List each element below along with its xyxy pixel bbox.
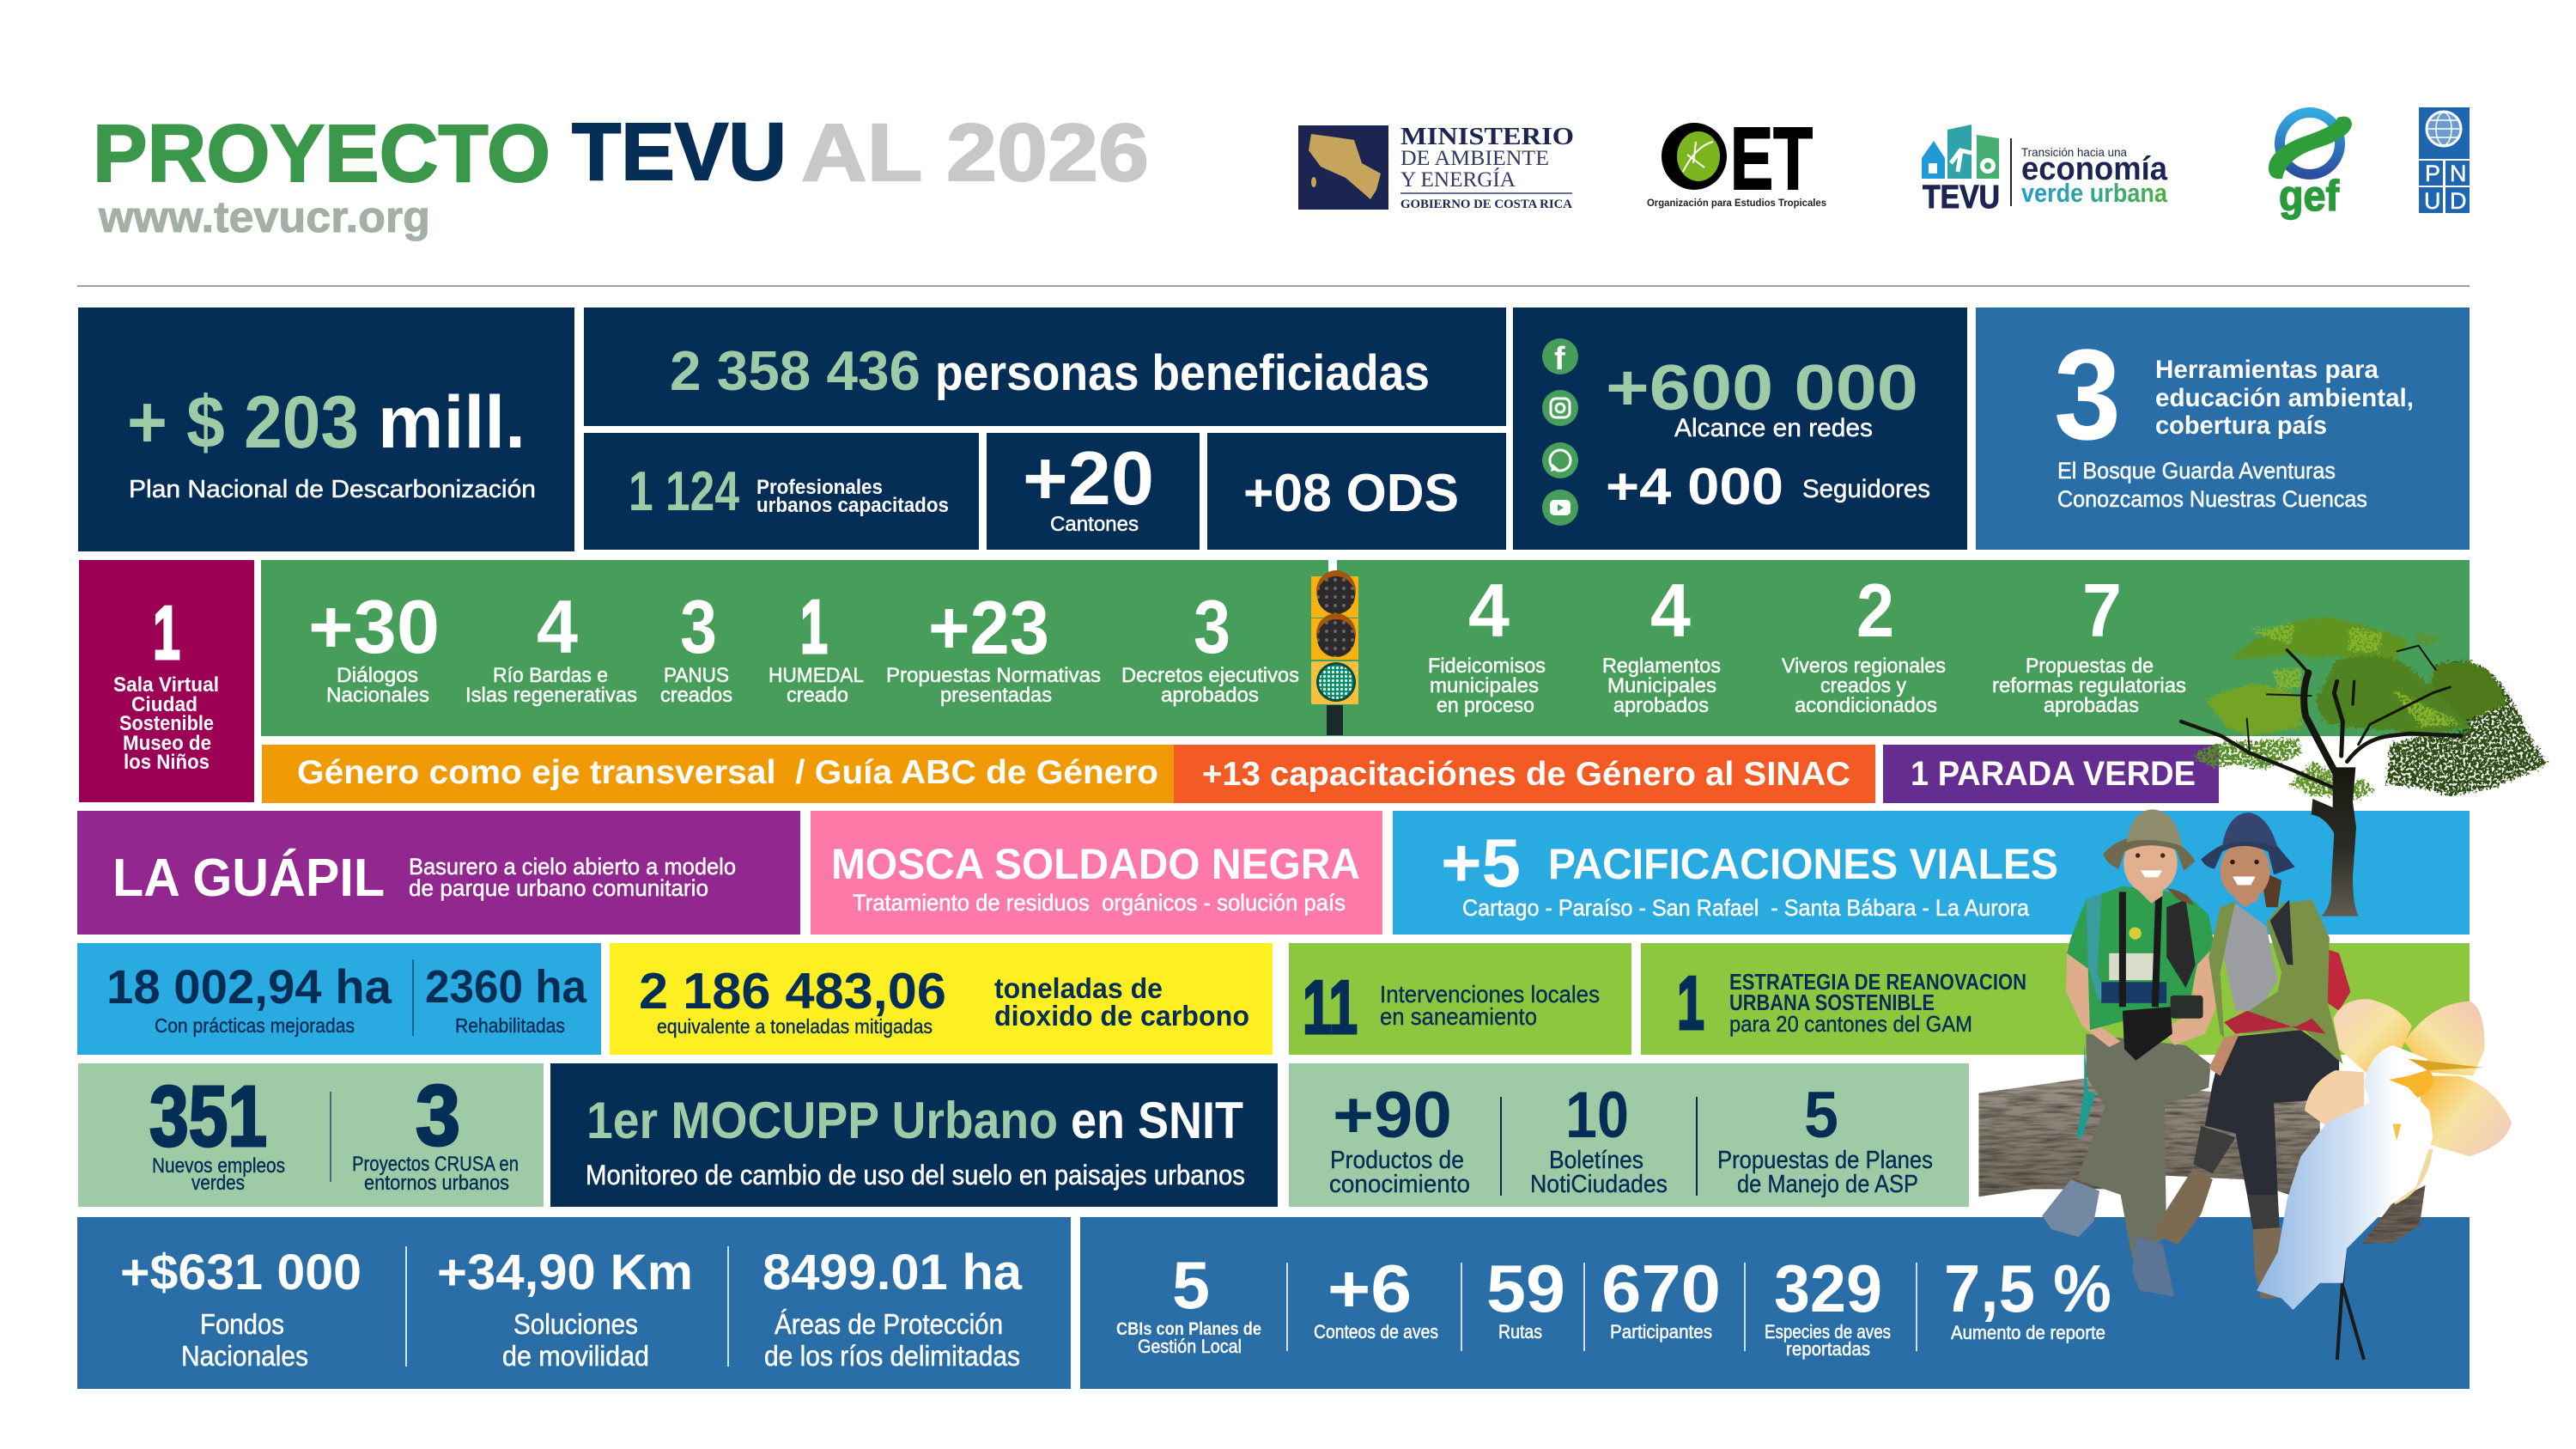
stat: areas de proteccion [762,1245,1023,1372]
panel: ODS [1207,433,1506,550]
icon: youtube [1542,490,1578,526]
stat: reglamentos: Reglamentos [1602,654,1721,678]
panel: cantones: +20 [1023,435,1154,521]
stat: rio bardas: Islas regenerativas [465,684,637,707]
label: Plan Nacional de Descarbonización [129,476,536,503]
logo: OET: Organización para Estudios Tropicales [1647,197,1826,209]
stat: empleos verdes: 351 [149,1068,267,1165]
panel: capacitaciones genero: +13 capacitaciónes de Género al SINAC [1202,756,1850,793]
stat: reglamentos: Municipales [1607,674,1716,697]
panel: cantones [987,433,1200,550]
panel: la guapil: Basurero a cielo abierto a modelo [409,854,736,880]
stat: empleos verdes: verdes [191,1172,245,1195]
panel: sala virtual: Sostenible [119,712,214,735]
panel: pacificaciones viales: +5 [1441,825,1521,901]
stat: propuestas normativas [886,585,1101,707]
stat: practicas mejoradas [106,959,392,1037]
stat: fondos nacionales [120,1245,361,1372]
stat: reformas: 7 [2082,568,2122,653]
stat: especies: 329 [1774,1251,1882,1326]
website url: www.tevucr.org [98,192,430,241]
stat: productos de conocimiento [1329,1079,1470,1198]
stat: dialogos: +30 [308,584,440,669]
stat: boletines: Boletínes [1549,1147,1643,1174]
logo: TEVU economia verde urbana: verde urbana [2021,178,2168,208]
panel: sala virtual: Ciudad [131,693,197,716]
stat: soluciones de movilidad [437,1245,693,1372]
stat: aumento de reporte: Aumento de reporte [1951,1322,2105,1343]
stat: areas de proteccion: de los ríos delimitadas [764,1340,1020,1372]
panel: la guapil [77,811,800,935]
title: AL 2026 [801,107,1149,198]
stat: humedal: creado [787,684,848,707]
stat: fideicomisos [1428,568,1546,717]
logo: Ministerio de Ambiente y Energia: Y ENERGÍA [1400,167,1516,192]
stat: reformas: Propuestas de [2026,654,2154,678]
panel: sala virtual: 1 [153,590,180,675]
panel: redes sociales [1513,307,1967,550]
panel: mocupp: en SNIT [1071,1092,1243,1149]
stat: proyectos crusa: entornos urbanos [364,1172,509,1195]
panel: herramientas [1976,307,2470,550]
stat: participantes: Participantes [1610,1321,1712,1342]
stat: propuestas normativas: +23 [928,585,1049,670]
stat: conteos [1314,1251,1438,1342]
panel: la guapil: de parque urbano comunitario [409,875,708,901]
panel: herramientas: Herramientas para [2155,356,2379,384]
logo: gef [2269,113,2352,220]
panel: mocupp: 1er MOCUPP Urbano [586,1092,1058,1149]
logo: Ministerio de Ambiente y Energia [1298,123,1574,211]
panel: personas beneficiadas: personas beneficiadas [935,345,1430,401]
stat: CBIs: CBIs con Planes de [1116,1319,1261,1339]
stat: planes de manejo [1717,1079,1933,1198]
logo: TEVU economia verde urbana: TEVU [1923,180,2000,216]
logo: TEVU economia verde urbana: Transición hacia una [2021,145,2127,159]
panel: empleos y proyectos [78,1063,544,1207]
stat: viveros: acondicionados [1795,694,1937,717]
stat: seguidores: +4 000 [1606,458,1783,515]
stat: decretos: aprobados [1161,684,1259,707]
stat: soluciones de movilidad: Soluciones [513,1308,638,1340]
stat: especies: reportadas [1786,1338,1870,1360]
icon: traffic light [1311,559,1358,735]
panel: profesionales capacitados [584,433,979,550]
panel: intervenciones locales: 11 [1303,965,1358,1050]
stat: rio bardas: 4 [537,584,578,669]
stat: rehabilitadas [425,961,587,1037]
stat: especies: Especies de aves [1765,1321,1891,1342]
panel: genero: Género como eje transversal / Guía ABC de Género [297,754,1158,791]
panel: toneladas de carbono: equivalente a toneladas mitigadas [657,1015,933,1038]
panel: estrategia de renovacion: para 20 cantones del GAM [1729,1011,1972,1037]
stat: areas de proteccion: 8499.01 ha [762,1245,1023,1300]
panel: descarbonizacion [78,307,574,551]
panel: toneladas de carbono: 2 186 483,06 [639,963,946,1020]
stat: reglamentos: aprobados [1613,694,1709,717]
stat: planes de manejo: de Manejo de ASP [1737,1171,1918,1198]
logo: PNUD: D [2450,188,2466,214]
title: PROYECTO [93,108,550,199]
logo: OET [1647,109,1826,209]
stat: rehabilitadas: Rehabilitadas [455,1014,565,1037]
stat: alcance en redes: Alcance en redes [1674,414,1873,442]
image: woman right [2151,813,2350,1299]
logo: TEVU economia verde urbana: economía [2021,151,2168,187]
logo: TEVU economia verde urbana [1922,125,2168,216]
stat: fideicomisos: 4 [1468,568,1510,653]
stat: conteos: Conteos de aves [1314,1321,1438,1342]
stat: alcance en redes [1606,351,1918,442]
stat: panus: creados [660,684,732,707]
logo: PNUD [2419,107,2470,214]
stat: fondos nacionales: Fondos [200,1308,284,1340]
image: log [1978,1079,2426,1244]
panel: mocupp [550,1063,1278,1207]
icon: whatsapp [1542,442,1578,478]
title [93,107,1149,199]
stat: dialogos [308,584,440,707]
stat: 203 millones: mill. [378,381,526,464]
stat: planes de manejo: 5 [1804,1079,1838,1152]
panel: productos [1289,1063,1969,1207]
stat: aumento de reporte: 7,5 % [1944,1251,2111,1326]
panel: herramientas: Conozcamos Nuestras Cuencas [2057,486,2367,512]
panel: pacificaciones viales: Cartago - Paraíso - San Rafael - Santa Bábara - La Aurora [1462,895,2030,921]
stat: dialogos: Diálogos [337,664,418,687]
logo: PNUD: P [2425,161,2440,186]
panel: toneladas de carbono [610,943,1273,1055]
stat: humedal: HUMEDAL [769,664,864,687]
stat: CBIs [1116,1247,1261,1357]
stat: proyectos crusa: 3 [416,1068,460,1164]
panel: herramientas: 3 [2054,322,2121,466]
stat: empleos verdes: Nuevos empleos [152,1154,285,1178]
stat: reformas: aprobadas [2044,694,2139,717]
stat: productos de conocimiento: +90 [1333,1079,1452,1152]
panel: estrategia de renovacion: URBANA SOSTENIBLE [1729,989,1935,1015]
title: TEVU [572,107,787,198]
panel: cantones: Cantones [1050,513,1139,536]
stat: boletines: NotiCiudades [1530,1171,1668,1198]
stat: reglamentos [1602,568,1721,717]
panel: conteos de aves [1080,1217,2470,1389]
panel: sala virtual: los Niños [124,751,210,774]
stat: decretos: 3 [1194,584,1230,669]
stat: reglamentos: 4 [1650,568,1691,653]
image: flower [2305,999,2512,1204]
icon: instagram [1542,390,1578,426]
image: tree [2181,618,2548,916]
stat: proyectos crusa: Proyectos CRUSA en [352,1153,519,1176]
stat: conteos: +6 [1327,1251,1412,1326]
stat: productos de conocimiento: conocimiento [1329,1171,1470,1198]
stat: viveros: creados y [1820,674,1906,697]
panel: sala virtual: Museo de [123,732,211,755]
panel: genero [262,745,1174,803]
panel: personas beneficiadas [584,307,1506,426]
stat: fondos nacionales: +$631 000 [120,1245,361,1300]
stat: practicas mejoradas: 18 002,94 ha [106,959,392,1014]
panel: profesionales capacitados: 1 124 [629,460,739,522]
panel: herramientas: El Bosque Guarda Aventuras [2057,458,2336,484]
stat: humedal [769,584,864,707]
panel: mosca soldado negra: MOSCA SOLDADO NEGRA [831,840,1360,888]
icon: facebook: f [1554,341,1565,377]
stat: dialogos: Nacionales [326,684,429,707]
stat: 203 millones [127,381,526,464]
stat: decretos [1121,584,1299,707]
image: women on log with flower and egret [1978,809,2512,1360]
stat: propuestas normativas: presentadas [940,684,1052,707]
stat: reformas [1992,568,2186,717]
logo: Ministerio de Ambiente y Energia: GOBIERNO DE COSTA RICA [1400,198,1572,211]
panel: toneladas de carbono: dioxido de carbono [994,1000,1249,1032]
panel: ODS: +08 ODS [1243,464,1459,523]
panel: profesionales capacitados: Profesionales [756,476,883,499]
stat: propuestas normativas: Propuestas Normativas [886,664,1101,687]
logo: Ministerio de Ambiente y Energia: MINISTERIO [1400,123,1574,150]
panel: sala virtual: Sala Virtual [113,673,219,697]
stat: soluciones de movilidad: +34,90 Km [437,1245,693,1300]
panel: parada verde [1883,745,2219,803]
stat: productos de conocimiento: Productos de [1330,1147,1464,1174]
panel: la guapil: LA GUÁPIL [112,849,385,908]
panel: pacificaciones viales: PACIFICACIONES VIALES [1548,840,2058,888]
stat: seguidores [1606,458,1930,515]
panel: hectareas [77,943,601,1055]
panel: toneladas de carbono: toneladas de [994,972,1163,1004]
panel: intervenciones locales [1289,943,1631,1055]
stat: rehabilitadas: 2360 ha [425,961,587,1013]
panel: estrategia de renovacion [1641,943,2470,1055]
stat: seguidores: Seguidores [1802,475,1930,503]
stat: panus: PANUS [664,664,729,687]
panel: herramientas: educación ambiental, [2155,384,2414,412]
panel: mosca soldado negra [811,811,1382,935]
stat: rio bardas [465,584,637,707]
stat: panus: 3 [680,584,717,669]
stat: fideicomisos: en proceso [1437,694,1534,717]
panel: personas beneficiadas: 2 358 436 [670,339,920,402]
panel: sala virtual [79,560,254,802]
panel: mocupp: Monitoreo de cambio de uso del suelo en paisajes urbanos [586,1160,1245,1190]
stat: fideicomisos: Fideicomisos [1428,654,1546,678]
panel: pacificaciones viales [1393,811,2470,935]
stat: viveros [1782,568,1946,717]
panel: estrategia de renovacion: ESTRATEGIA DE REANOVACION [1729,969,2026,995]
stat: humedal: 1 [800,584,828,669]
logo: Ministerio de Ambiente y Energia: DE AMBIENTE [1400,147,1549,170]
logo: OET: ET [1730,109,1813,208]
stat: CBIs: Gestión Local [1138,1336,1242,1357]
stat: fideicomisos: municipales [1430,674,1539,697]
image: woman left [2042,809,2216,1296]
panel: parada verde: 1 PARADA VERDE [1911,755,2196,793]
panel: estrategia de renovacion: 1 [1677,960,1704,1045]
stat: practicas mejoradas: Con prácticas mejoradas [155,1014,355,1037]
logo: PNUD: U [2424,188,2440,214]
stat: proyectos crusa [352,1068,519,1195]
stat: CBIs: 5 [1172,1247,1210,1323]
panel: profesionales capacitados: urbanos capacitados [756,494,949,517]
panel: intervenciones locales: en saneamiento [1380,1003,1537,1030]
stat: rutas: 59 [1486,1251,1565,1326]
stat: especies [1765,1251,1891,1360]
stat: areas de proteccion: Áreas de Protección [775,1308,1003,1340]
logo: PNUD: N [2450,161,2466,186]
panel: mosca soldado negra: Tratamiento de residuos orgánicos - solución país [853,890,1346,916]
stat: boletines: 10 [1565,1079,1629,1152]
panel: metas verdes [261,560,2470,736]
panel: herramientas: cobertura país [2155,411,2327,440]
icon: facebook [1542,338,1578,377]
stat: reformas: reformas regulatorias [1992,674,2186,697]
stat: rutas: Rutas [1498,1321,1542,1342]
stat: panus [660,584,732,707]
image: egret [2257,1045,2482,1360]
stat: soluciones de movilidad: de movilidad [502,1340,649,1372]
panel: intervenciones locales: Intervenciones locales [1380,981,1600,1008]
stat: rio bardas: Río Bardas e [493,664,608,687]
logo: gef: gef [2279,172,2339,220]
stat: viveros: 2 [1856,568,1894,653]
stat: 203 millones: + $ 203 [127,381,359,464]
stat: decretos: Decretos ejecutivos [1121,664,1299,687]
panel: capacitaciones genero [1174,745,1875,803]
stat: fondos nacionales: Nacionales [181,1340,308,1372]
stat: boletines [1530,1079,1668,1198]
stat: planes de manejo: Propuestas de Planes [1717,1147,1933,1174]
panel: fondos movilidad areas [77,1217,1071,1389]
stat: viveros: Viveros regionales [1782,654,1946,678]
stat: alcance en redes: +600 000 [1606,351,1918,423]
stat: participantes: 670 [1601,1251,1721,1326]
